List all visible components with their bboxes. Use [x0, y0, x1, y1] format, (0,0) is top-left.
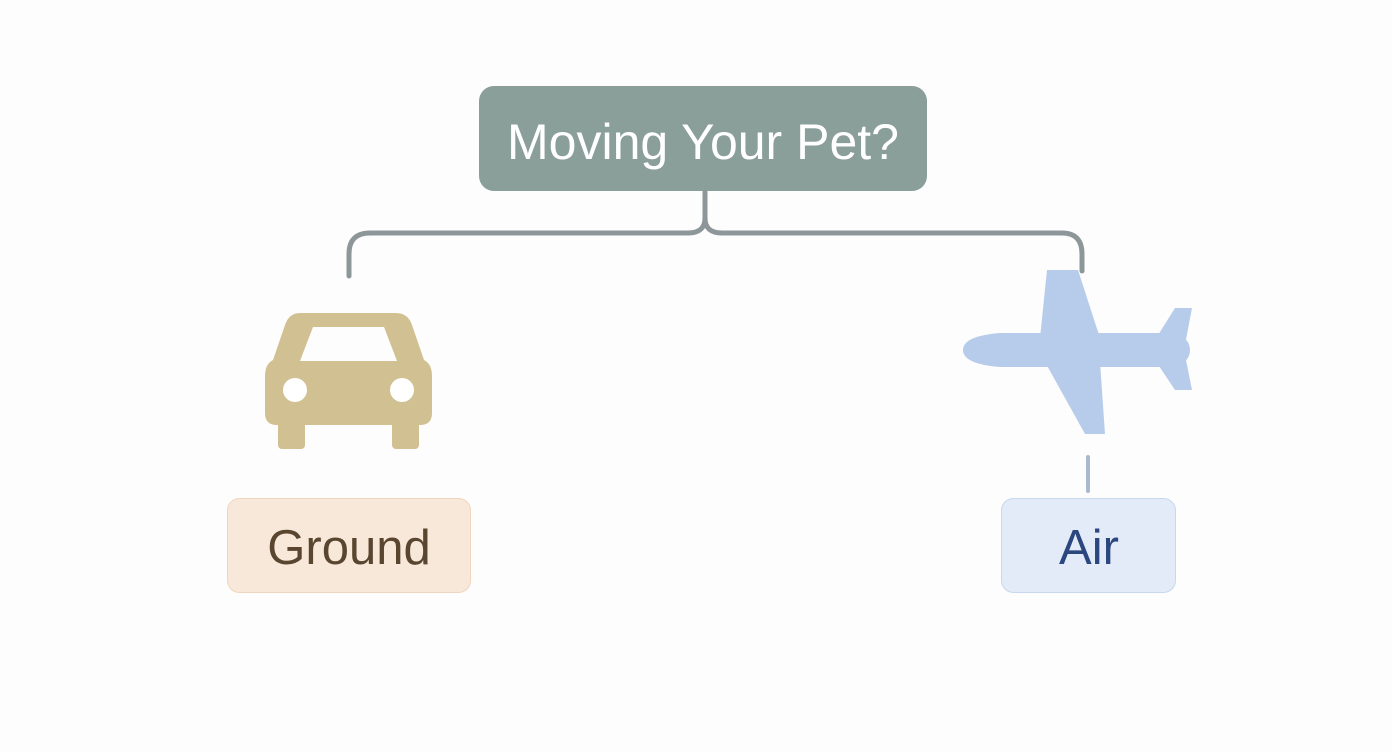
- box: Ground: [228, 498, 470, 592]
- title box: Moving Your Pet?: [507, 114, 899, 170]
- icon: airplane: [963, 270, 1192, 434]
- title box: [479, 86, 927, 191]
- icon: car: [265, 313, 432, 449]
- box: Ground: Ground: [267, 521, 431, 575]
- box: Air: [1002, 498, 1176, 592]
- box: Air: Air: [1059, 521, 1119, 575]
- connector: air dash: [1086, 457, 1090, 491]
- connector bracket: [349, 192, 1082, 276]
